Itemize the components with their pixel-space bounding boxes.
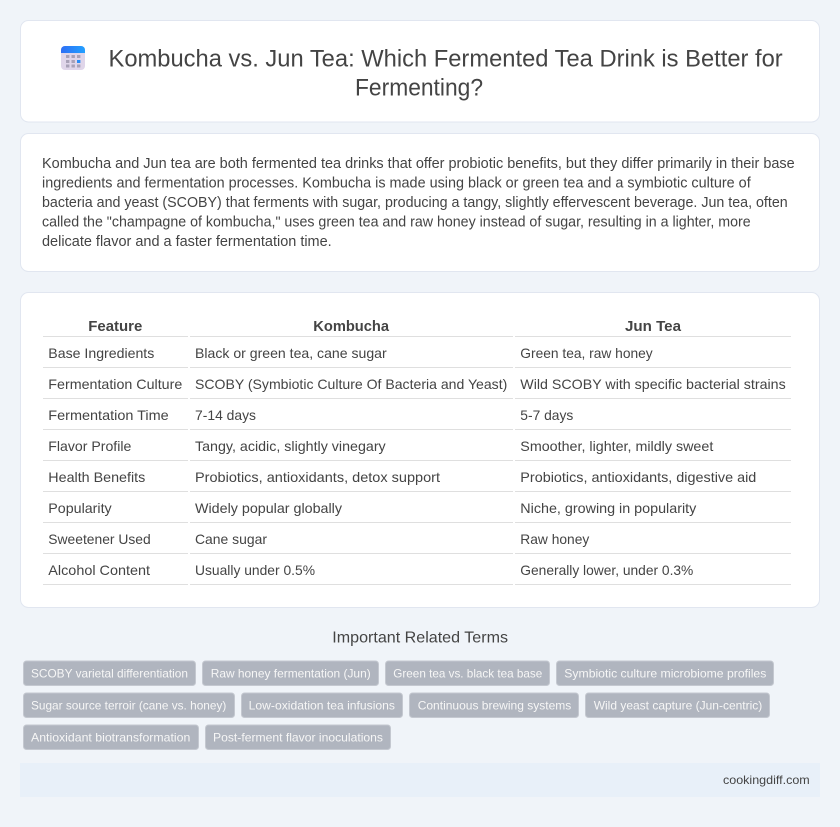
row: base ingredients: Black or green tea, cane sugar: [195, 345, 387, 361]
row: flavor profile: [48, 438, 713, 454]
tag: low-oxidation infusions: Low-oxidation tea infusions: [249, 698, 395, 712]
row: sweetener used: Cane sugar: [195, 531, 267, 547]
table header row: Kombucha: [313, 319, 390, 335]
tag: green vs black tea base: Green tea vs. black tea base: [393, 666, 543, 680]
tag: sugar source terroir: [24, 693, 234, 718]
tag: green vs black tea base: [386, 661, 550, 686]
row: popularity: Popularity: [48, 500, 112, 516]
table header row: Jun Tea: [625, 319, 682, 335]
row: fermentation culture: [48, 376, 786, 392]
tag: symbiotic culture profiles: Symbiotic culture microbiome profiles: [564, 666, 766, 680]
icon: calendar: [61, 46, 85, 70]
row: fermentation culture: Wild SCOBY with specific bacterial strains: [520, 376, 786, 392]
row: health benefits: Probiotics, antioxidants, digestive aid: [520, 469, 756, 485]
row: alcohol content: [48, 562, 693, 578]
intro paragraph: delicate flavor and a faster fermentation time.: [42, 234, 332, 250]
title: Fermenting?: [355, 74, 483, 102]
row: health benefits: Probiotics, antioxidants, detox support: [195, 469, 440, 485]
row: fermentation time: 7-14 days: [195, 407, 256, 423]
comparison table panel: [20, 292, 820, 608]
row: fermentation time: Fermentation Time: [48, 407, 169, 423]
tag: low-oxidation infusions: [242, 693, 402, 718]
intro paragraph: called the "champagne of kombucha," uses green tea and raw honey instead of sugar, resulting in a lighter, more: [42, 214, 751, 230]
intro paragraph: ingredients and fermentation processes. Kombucha is made using black or green tea and a symbiotic culture of: [42, 175, 752, 191]
intro paragraph: [42, 156, 795, 250]
row: fermentation culture: Fermentation Culture: [48, 376, 183, 392]
row: sweetener used: Sweetener Used: [48, 531, 151, 547]
row: alcohol content: Usually under 0.5%: [195, 562, 315, 578]
row: popularity: [48, 500, 696, 516]
tag: raw honey fermentation: [202, 661, 378, 686]
row: fermentation culture: SCOBY (Symbiotic Culture Of Bacteria and Yeast): [195, 376, 507, 392]
row: health benefits: [48, 469, 756, 485]
tag: post-ferment inoculations: [206, 725, 390, 750]
tag list: [24, 661, 774, 750]
intro paragraph: bacteria and yeast (SCOBY) that ferments with sugar, producing a tangy, slightly effervescent beverage. Jun tea, often: [42, 195, 788, 211]
row: flavor profile: Smoother, lighter, mildly sweet: [520, 438, 713, 454]
row: base ingredients: Base Ingredients: [48, 345, 154, 361]
footer source text: cookingdiff.com: [723, 773, 810, 787]
header panel: [20, 20, 820, 122]
row: alcohol content: Generally lower, under 0.3%: [520, 562, 693, 578]
row: fermentation time: [48, 407, 573, 423]
row: alcohol content: Alcohol Content: [48, 562, 150, 578]
title: [108, 46, 783, 102]
row: sweetener used: Raw honey: [520, 531, 589, 547]
row: sweetener used: [48, 531, 589, 547]
row: base ingredients: Green tea, raw honey: [520, 345, 653, 361]
intro panel: [20, 134, 820, 272]
row: fermentation time: 5-7 days: [520, 407, 573, 423]
tag: continuous brewing: [410, 693, 578, 718]
table header row: [88, 319, 682, 335]
row: popularity: Widely popular globally: [195, 500, 342, 516]
row: flavor profile: Flavor Profile: [48, 438, 132, 454]
tag: SCOBY varietal differentiation: [24, 661, 196, 686]
tag: symbiotic culture profiles: [556, 661, 774, 686]
footer bar: [20, 763, 820, 797]
tag: continuous brewing: Continuous brewing systems: [418, 698, 571, 712]
tag: sugar source terroir: Sugar source terroir (cane vs. honey): [31, 698, 226, 712]
table header row: Feature: [88, 319, 142, 335]
tag: antioxidant biotransformation: Antioxidant biotransformation: [31, 730, 190, 744]
row: base ingredients: [48, 345, 653, 361]
tag: raw honey fermentation: Raw honey fermentation (Jun): [211, 666, 371, 680]
intro paragraph: Kombucha and Jun tea are both fermented tea drinks that offer probiotic benefits, but they differ primarily in their base: [42, 156, 795, 172]
tag: SCOBY varietal differentiation: SCOBY varietal differentiation: [31, 666, 188, 680]
row: popularity: Niche, growing in popularity: [520, 500, 696, 516]
tag: antioxidant biotransformation: [24, 725, 198, 750]
related terms heading: Important Related Terms: [332, 630, 508, 647]
tag: wild yeast capture: Wild yeast capture (Jun-centric): [594, 698, 762, 712]
title: Kombucha vs. Jun Tea: Which Fermented Tea Drink is Better for: [108, 46, 783, 72]
related terms section: [24, 630, 774, 750]
tag: wild yeast capture: [586, 693, 770, 718]
row: flavor profile: Tangy, acidic, slightly vinegary: [195, 438, 386, 454]
tag: post-ferment inoculations: Post-ferment flavor inoculations: [213, 730, 383, 744]
row: health benefits: Health Benefits: [48, 469, 145, 485]
